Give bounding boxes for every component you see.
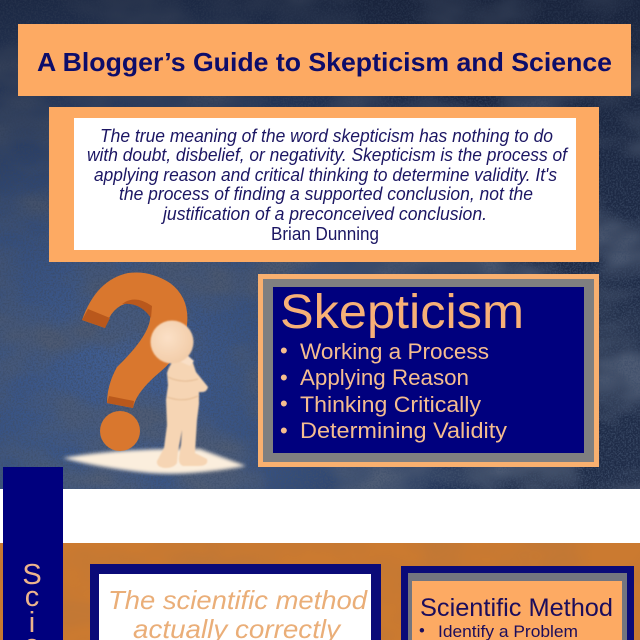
title: A Blogger’s Guide to Skepticism and Science [37, 47, 612, 77]
platform [63, 449, 246, 474]
icon: thinking figure with question mark [63, 272, 246, 474]
quote text: The scientific method [108, 585, 369, 615]
bullet list: Thinking Critically [300, 392, 481, 417]
bullet list: • [280, 365, 288, 390]
panel: Skepticism [258, 274, 599, 467]
title banner [18, 24, 631, 96]
panel: Scientific Method [401, 566, 634, 640]
quote text: The true meaning of the word skepticism has nothing to do [100, 125, 553, 146]
bullet list: Determining Validity [300, 418, 507, 443]
heading: Skepticism: Skepticism [280, 286, 524, 339]
quote text [87, 125, 569, 224]
vertical heading: S [22, 559, 42, 591]
vertical heading: i [29, 607, 35, 639]
bullet list: Working a Process [300, 339, 489, 364]
bullet list: • [280, 418, 288, 443]
bullet list: Applying Reason [300, 365, 469, 390]
bullet list: • [280, 391, 288, 416]
quote text: justification of a preconceived conclusion. [160, 203, 487, 224]
thinking person [150, 320, 208, 468]
quote text: applying reason and critical thinking to determine validity. It's [94, 164, 557, 185]
bullet list [280, 338, 507, 443]
quote text: the process of finding a supported conclusion, not the [119, 183, 533, 204]
panel: scientific method quote [90, 564, 381, 640]
bullet list: • [280, 338, 288, 363]
panel: quote [49, 107, 599, 262]
quote text [108, 585, 369, 640]
quote text: with doubt, disbelief, or negativity. Skepticism is the process of [87, 144, 569, 165]
panel: Science side tab [3, 467, 63, 640]
list item: • [419, 622, 425, 640]
question mark [82, 272, 187, 451]
quote attribution: Brian Dunning [271, 224, 379, 244]
textured night-blue background [0, 0, 640, 489]
vertical heading [22, 559, 42, 640]
panel: orange science background [0, 543, 640, 640]
vertical heading: c [25, 581, 39, 613]
heading: Scientific Method [420, 594, 613, 622]
